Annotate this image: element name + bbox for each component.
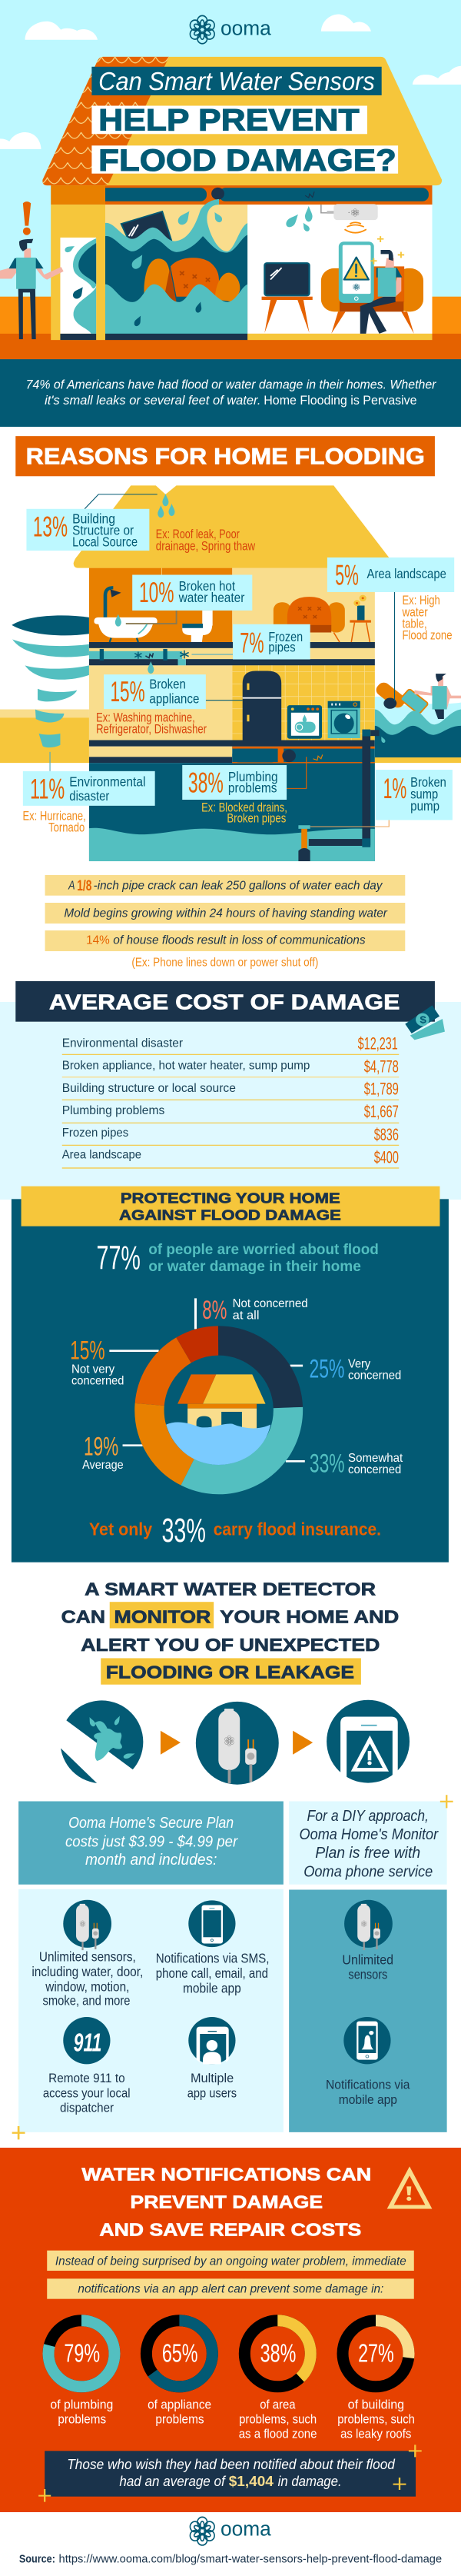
title: help prevent: HELP PREVENT (98, 102, 360, 137)
donut label: 33% (310, 1448, 403, 1478)
man with exclamation mark (0, 201, 64, 339)
arrow (161, 1731, 181, 1755)
ooma logo: ooma (221, 17, 271, 40)
snowflakes and crack (134, 651, 189, 659)
stat: 77% worried: 77% (97, 1240, 141, 1277)
callout: 15% appliance: Broken (149, 676, 186, 692)
stat: 77% worried (97, 1240, 379, 1277)
roof (74, 485, 397, 568)
callout: 13% building: Building (72, 511, 115, 526)
examples: appliance: Ex: Washing machine, (96, 711, 195, 724)
plan: secure header: month and includes: (85, 1852, 217, 1869)
donut: 38% area (244, 2321, 310, 2387)
clouds (0, 15, 461, 149)
fact: communications: of house floods result in loss of communications (113, 933, 366, 947)
donut captions: problems, such (337, 2412, 415, 2426)
cost table: Building structure or local source (62, 1080, 236, 1095)
callout: 11% environmental (23, 771, 155, 806)
donut label: 25%: 25% (310, 1353, 344, 1383)
closing callout (45, 2451, 416, 2497)
cost table: $1,667 (364, 1103, 399, 1122)
plus signs (38, 2445, 422, 2502)
fact: mold (45, 903, 405, 924)
heading: average cost: AVERAGE COST OF DAMAGE (49, 991, 400, 1014)
donut label: 19%: Average (82, 1457, 124, 1472)
plan: monitor header: Ooma Home's Monitor (300, 1826, 439, 1843)
donut label: 15%: Not very (71, 1362, 115, 1376)
callout: 11% environmental: Environmental (69, 774, 145, 789)
plus sign (12, 2126, 25, 2139)
cost table (62, 1035, 399, 1168)
callout: 38% plumbing: 38% (188, 767, 224, 799)
feature: unlimited sensors: window, motion, (45, 1979, 129, 1994)
donut captions: problems (58, 2412, 106, 2426)
intro band: Home Flooding is Pervasive (264, 393, 417, 408)
cost table: Area landscape (62, 1147, 141, 1161)
examples: landscape: Ex: High (402, 594, 440, 607)
flood and man outside (373, 674, 461, 763)
callout: 7% frozen pipes: pipes (268, 639, 296, 654)
cost table: Broken appliance, hot water heater, sump pump (62, 1058, 310, 1072)
footer ooma logo (190, 2517, 271, 2545)
callout: 5% landscape: 5% (335, 560, 359, 591)
panel: reasons for home flooding (0, 436, 461, 861)
heading: smart water detector: FLOODING OR LEAKAGE (106, 1662, 354, 1682)
insurance statement: 33% (161, 1512, 206, 1549)
examples: roof: Ex: Roof leak, Poor (156, 528, 240, 541)
fact: pipe crack: -inch pipe crack can leak 250 gallons of water each day (94, 878, 383, 892)
plan: monitor header: Ooma phone service (303, 1863, 433, 1880)
heading: water notifications: WATER NOTIFICATIONS CAN (81, 2165, 371, 2185)
callout: 38% plumbing: problems (228, 780, 277, 796)
callout: 15% appliance: appliance (149, 691, 199, 706)
closing callout: had an average of (119, 2474, 227, 2490)
plan: secure header: Ooma Home's Secure Plan (68, 1815, 234, 1832)
donut captions (50, 2397, 415, 2441)
ground strips (0, 709, 89, 763)
cost table: $12,231 (358, 1035, 398, 1053)
fact: communications (45, 930, 405, 951)
icon: money (405, 1005, 445, 1040)
feature: multiple app users: app users (187, 2085, 237, 2100)
donut: 65% appliance (146, 2321, 212, 2387)
panel: facts and average cost (15, 875, 445, 1168)
feature: notifications via app (326, 2017, 410, 2107)
cost table: $836 (374, 1126, 399, 1145)
heading: smart water detector: A SMART WATER DETECTOR (85, 1579, 376, 1599)
title: flood damage: FLOOD DAMAGE? (98, 142, 396, 178)
donut label: 19%: 19% (84, 1431, 118, 1461)
panel: protecting your home (12, 1186, 449, 1563)
callout: 1% sump pump: sump (410, 786, 438, 801)
heading: smart water detector (61, 1579, 399, 1685)
sump pump (298, 730, 380, 861)
drops and leader lines (50, 494, 395, 827)
heading: reasons: REASONS FOR HOME FLOODING (26, 444, 425, 469)
closing callout: in damage. (278, 2474, 342, 2490)
heading: reasons (15, 436, 435, 476)
donut captions: of area (260, 2397, 296, 2411)
callout: 1% sump pump (376, 770, 453, 820)
feature: notifications sms (156, 1900, 270, 1995)
donut captions: of plumbing (50, 2397, 113, 2411)
examples: plumbing (201, 800, 287, 825)
donut label: 25%: Very (348, 1356, 370, 1370)
callout: 10% water heater: 10% (139, 577, 174, 609)
feature: unlimited sensors: smoke, and more (42, 1993, 131, 2008)
callout: 7% frozen pipes (233, 624, 310, 659)
cost table: $400 (374, 1149, 399, 1167)
donut label: 25% (310, 1353, 401, 1383)
feature: notifications via app: mobile app (339, 2092, 397, 2107)
callout: 11% environmental: disaster (69, 788, 109, 804)
heading: protecting: AGAINST FLOOD DAMAGE (119, 1208, 341, 1223)
callout: 10% water heater (132, 574, 252, 611)
callout: 13% building: Local Source (72, 534, 138, 550)
heading: smart water detector: ALERT YOU OF UNEXPECTED (81, 1636, 380, 1656)
donut label: 33%: 33% (310, 1448, 344, 1478)
bathroom (94, 587, 213, 642)
donut label: 33%: Somewhat (348, 1450, 403, 1465)
plus sign (440, 1795, 453, 1808)
donut numbers: 65% (162, 2339, 198, 2368)
house walls (51, 185, 432, 340)
feature: notifications sms: phone call, email, and (156, 1966, 268, 1981)
callout: 13% building: 13% (33, 511, 68, 543)
callout: 1% sump pump: Broken (410, 774, 446, 790)
plan: secure features panel (18, 1889, 284, 2132)
feature: notifications sms: Notifications via SMS, (156, 1951, 270, 1965)
heading: water notifications (81, 2165, 371, 2240)
panel: smart water detector (18, 1579, 453, 2132)
donut chart: concern levels (149, 1341, 288, 1479)
heading: smart water detector: CAN (61, 1607, 105, 1628)
panel: donut labels, closing callout and footer (19, 2339, 442, 2565)
heading: smart water detector: YOUR HOME AND (220, 1607, 399, 1628)
callout: 13% building (26, 509, 149, 551)
feature: unlimited sensors (monitor): Unlimited (342, 1952, 393, 1967)
callout: 13% building: Structure or (72, 522, 134, 538)
callout: 15% appliance (104, 674, 206, 709)
fact: pipe crack (45, 875, 405, 896)
feature: multiple app users (187, 2017, 237, 2100)
feature: remote 911: 911 (74, 2029, 101, 2057)
feature: notifications sms: mobile app (183, 1981, 241, 1995)
callout: 5% landscape (327, 557, 454, 592)
door with water (60, 238, 96, 340)
dry room (247, 204, 432, 340)
plan: monitor header: For a DIY approach, (307, 1808, 429, 1825)
ooma logo (190, 15, 271, 44)
icon: phone alert circle (327, 1700, 410, 1783)
cost table: $4,778 (364, 1058, 399, 1077)
text box: notifications via app (47, 2278, 414, 2299)
examples: plumbing: Ex: Blocked drains, (201, 800, 287, 814)
note: phone lines: (Ex: Phone lines down or power shut off) (131, 957, 318, 969)
feature: remote 911 (43, 2017, 131, 2115)
cost table: $1,789 (364, 1080, 399, 1099)
callout: 1% sump pump: 1% (383, 773, 406, 805)
kitchen appliances (243, 671, 360, 740)
donut numbers: 38% (260, 2339, 296, 2368)
heading: average cost (15, 981, 435, 1022)
stat: 77% worried: or water damage in their home (148, 1258, 361, 1275)
panel: pale background for cost section (0, 1002, 461, 1200)
callout: 7% frozen pipes: 7% (240, 627, 264, 659)
flooded room (105, 199, 247, 340)
feature: notifications via app: Notifications via (326, 2078, 410, 2092)
arrow (293, 1731, 313, 1755)
icon: money: $ (420, 1015, 426, 1026)
examples: roof: drainage, Spring thaw (156, 539, 256, 553)
heading: smart water detector: MONITOR (114, 1607, 211, 1628)
callout: 38% plumbing (182, 765, 287, 800)
feature: remote 911: access your local (43, 2085, 131, 2100)
tornado (12, 615, 89, 747)
insurance statement (89, 1512, 381, 1549)
donut: 79% plumbing (48, 2321, 114, 2387)
donut label: 8%: Not concerned (233, 1296, 308, 1310)
feature: unlimited sensors (monitor) (342, 1900, 393, 1982)
panel: remaining features and notifications heading (12, 2017, 429, 2299)
fact: pipe crack: 1/8 (77, 877, 91, 894)
examples: environmental (22, 809, 86, 834)
feature: remote 911: dispatcher (60, 2101, 114, 2115)
donut captions: as a flood zone (239, 2427, 317, 2441)
insurance statement: Yet only (89, 1520, 153, 1539)
plan: monitor header (289, 1801, 447, 1885)
icon: sensor circle (196, 1702, 279, 1785)
plan: secure header (18, 1801, 284, 1885)
icon: warning triangle (390, 2171, 429, 2207)
feature: unlimited sensors (32, 1900, 143, 2008)
insurance statement: carry flood insurance. (214, 1520, 381, 1539)
heading: protecting (22, 1186, 439, 1226)
examples: plumbing: Broken pipes (227, 811, 286, 825)
heading: protecting: PROTECTING YOUR HOME (121, 1191, 340, 1206)
donut numbers (64, 2339, 394, 2368)
callout: 10% water heater: water heater (178, 590, 244, 605)
fact: mold: Mold begins growing within 24 hours of having standing water (64, 906, 388, 920)
donut label: 15% (70, 1335, 124, 1387)
donut numbers: 27% (358, 2339, 394, 2368)
feature: unlimited sensors: including water, door, (32, 1965, 143, 1979)
donut label: 33%: concerned (348, 1462, 401, 1476)
fact: pipe crack: A (68, 878, 75, 892)
panel: water notifications background (0, 2148, 461, 2512)
source line: Source: (19, 2554, 55, 2565)
examples: appliance (96, 711, 207, 736)
heading: water notifications: PREVENT DAMAGE (131, 2192, 323, 2212)
cost table: Environmental disaster (62, 1036, 183, 1050)
icon: flooded house (166, 1374, 270, 1465)
feature: multiple app users: Multiple (191, 2071, 234, 2085)
icon: water leak circle (56, 1700, 143, 1789)
leader lines (109, 1298, 305, 1461)
closing callout: $1,404 (229, 2474, 274, 2490)
examples: environmental: Tornado (48, 820, 85, 834)
examples: landscape: water (402, 605, 428, 619)
title: can smart water sensors: Can Smart Water Sensors (98, 68, 375, 96)
house cross-section (89, 568, 375, 861)
examples: roof (156, 528, 256, 553)
feature: unlimited sensors (monitor): sensors (348, 1967, 387, 1982)
intro band (0, 359, 461, 427)
plan: monitor header: Plan is free with (315, 1845, 420, 1862)
examples: appliance: Refrigerator, Dishwasher (96, 722, 207, 736)
donut label: 8%: 8% (202, 1294, 227, 1324)
donut label: 25%: concerned (348, 1367, 401, 1382)
callout: 15% appliance: 15% (110, 676, 145, 707)
examples: environmental: Ex: Hurricane, (22, 809, 86, 823)
donut captions: of appliance (148, 2397, 211, 2411)
text box: notifications via app: notifications via an app alert can prevent some damage in: (78, 2281, 384, 2295)
donut label: 8%: at all (233, 1307, 259, 1322)
cost table: Plumbing problems (62, 1103, 164, 1117)
donut captions: as leaky roofs (340, 2427, 411, 2441)
feature: remote 911: Remote 911 to (48, 2071, 125, 2085)
donut label: 15%: concerned (71, 1373, 124, 1387)
callout: 11% environmental: 11% (30, 774, 65, 805)
callout: 1% sump pump: pump (410, 798, 439, 814)
plan: monitor features panel (289, 1889, 447, 2132)
donut label: 8% (202, 1294, 308, 1324)
examples: landscape (402, 594, 453, 642)
panel: hero sky and house (0, 0, 461, 427)
donut captions: problems (155, 2412, 204, 2426)
heading: water notifications: AND SAVE REPAIR COSTS (99, 2220, 361, 2240)
donut numbers: 79% (64, 2339, 100, 2368)
fact: communications: 14% (86, 933, 110, 947)
ground (0, 297, 461, 360)
stat: 77% worried: of people are worried about flood (148, 1241, 379, 1258)
footer ooma logo: ooma (221, 2518, 271, 2541)
plan: secure header: costs just $3.99 - $4.99 per (65, 1833, 238, 1850)
text box: instead of being surprised (47, 2251, 414, 2271)
donut label: 15%: 15% (70, 1335, 105, 1365)
donut label: 19% (82, 1431, 124, 1472)
cost table: Frozen pipes (62, 1125, 128, 1140)
intro band: it's small leaks or several feet of water. (45, 393, 260, 408)
donut captions: problems, such (239, 2412, 317, 2426)
house roof (42, 57, 442, 185)
living room furniture (274, 595, 371, 642)
callout: 10% water heater: Broken hot (179, 578, 235, 594)
callout: 38% plumbing: Plumbing (228, 769, 278, 784)
examples: landscape: table, (402, 617, 427, 631)
feature: unlimited sensors: Unlimited sensors, (39, 1949, 136, 1965)
donut captions: of building (348, 2397, 404, 2411)
callout: 7% frozen pipes: Frozen (268, 629, 303, 644)
donut: 27% building (343, 2321, 409, 2387)
